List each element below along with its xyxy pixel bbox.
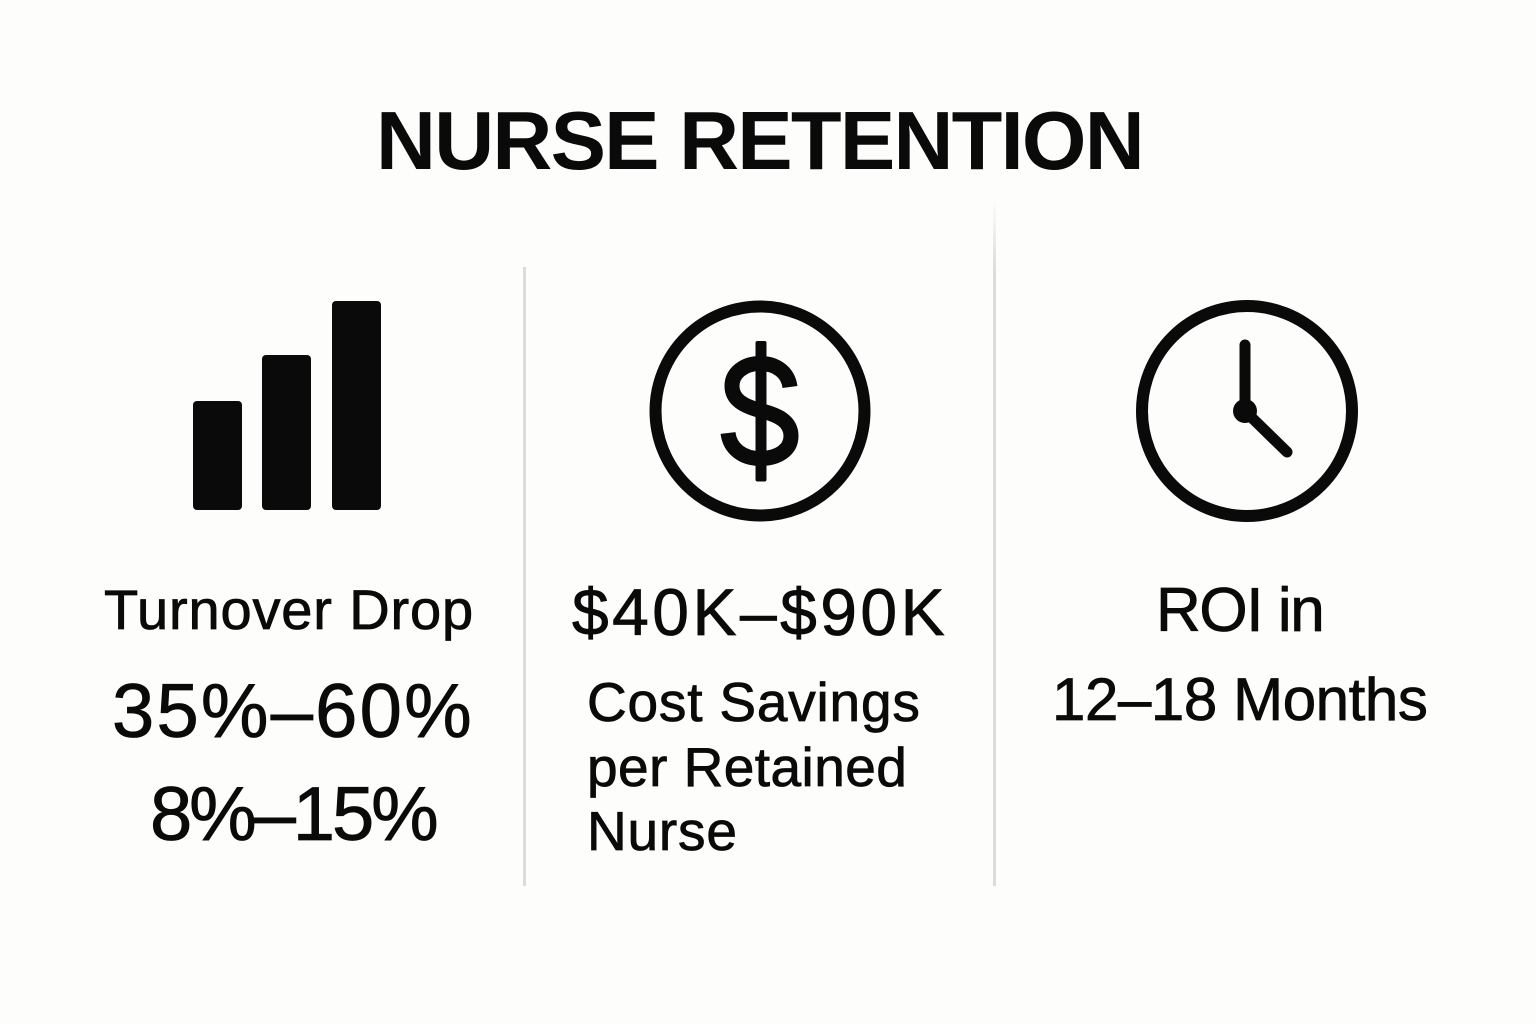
icon: bar chart bbox=[193, 301, 381, 510]
panel: turnover bbox=[104, 578, 474, 857]
panel: ROI bbox=[1052, 576, 1427, 733]
savings description: per Retained bbox=[587, 736, 907, 798]
savings amount: $40K–$90K bbox=[572, 575, 948, 649]
divider right bbox=[993, 200, 996, 886]
ROI label: ROI in bbox=[1156, 576, 1323, 645]
savings description: Nurse bbox=[587, 800, 738, 862]
secondary range: 8%–15% bbox=[150, 772, 436, 857]
title: NURSE RETENTION bbox=[376, 94, 1143, 187]
savings description: Cost Savings bbox=[587, 671, 921, 733]
panel: savings bbox=[572, 575, 948, 862]
icon: dollar circle bbox=[650, 300, 870, 522]
savings description bbox=[587, 671, 921, 862]
icon: clock bbox=[1136, 300, 1358, 522]
turnover label: Turnover Drop bbox=[104, 578, 474, 641]
ROI months: 12–18 Months bbox=[1052, 666, 1427, 733]
divider left bbox=[523, 267, 526, 886]
turnover range: 35%–60% bbox=[112, 669, 474, 754]
